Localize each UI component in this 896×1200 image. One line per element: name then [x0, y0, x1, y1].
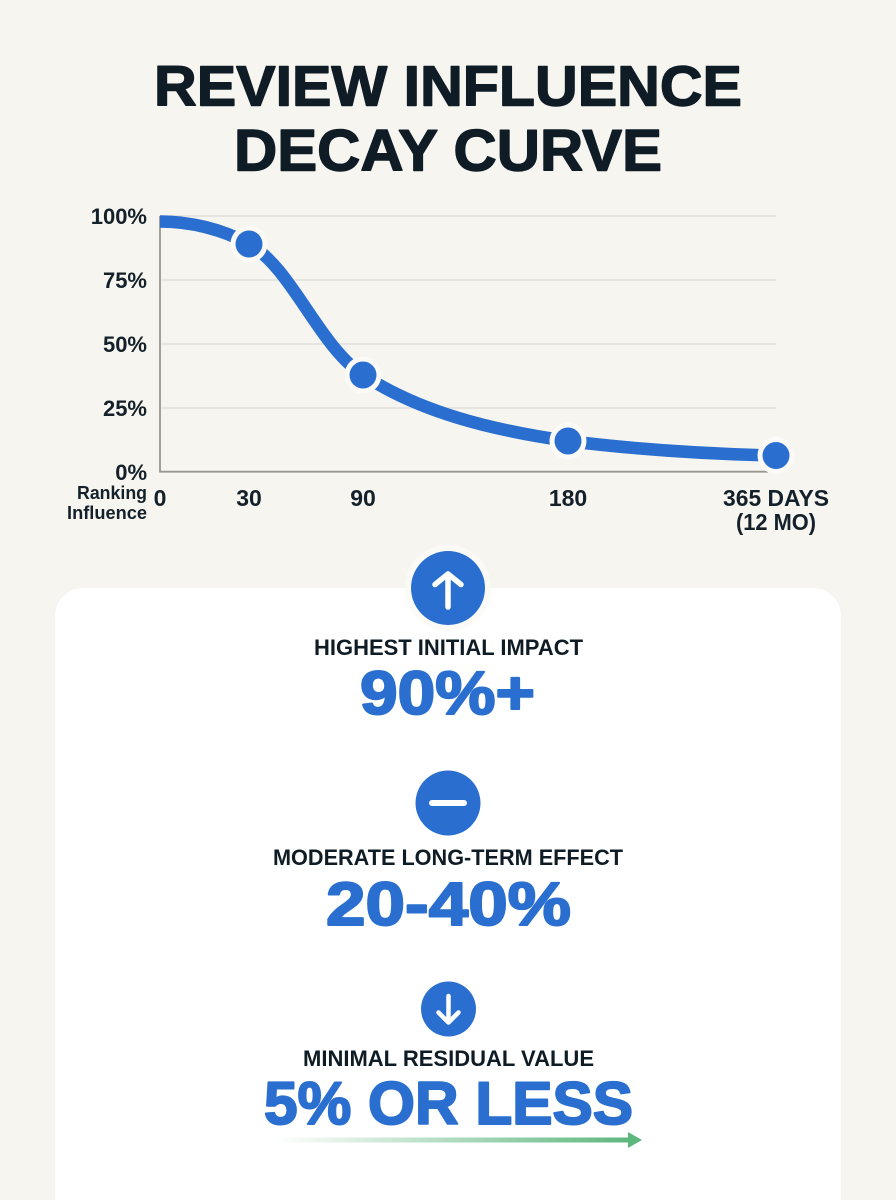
- icon: down arrow: [421, 982, 476, 1036]
- data point: day 30: [230, 226, 268, 262]
- data point: day 180: [550, 422, 586, 460]
- y axis title: [67, 483, 147, 523]
- x axis labels: 30: [236, 485, 262, 511]
- stat value: 20-40%: 20-40%: [326, 870, 571, 938]
- panel: key statistics: [55, 545, 841, 1200]
- y axis labels: 100%: [91, 204, 147, 229]
- x axis labels: 365 DAYS: [723, 485, 829, 511]
- x axis labels: [154, 485, 829, 535]
- stat value: 90%+: 90%+: [360, 659, 535, 727]
- y axis labels: 0%: [115, 460, 147, 485]
- y axis labels: [91, 204, 147, 485]
- y axis labels: 75%: [103, 268, 147, 293]
- decay curve: [160, 222, 775, 456]
- x axis labels: 180: [549, 485, 587, 511]
- data point: day 365: [758, 437, 794, 474]
- x axis labels: 90: [350, 485, 376, 511]
- x axis labels: 0: [154, 485, 166, 511]
- x axis labels: (12 MO): [736, 509, 816, 535]
- icon: up arrow: [405, 545, 491, 631]
- y axis labels: 25%: [103, 396, 147, 421]
- y axis title: Ranking: [77, 483, 147, 503]
- title: [154, 54, 742, 184]
- icon: minus: [416, 770, 480, 836]
- title: DECAY CURVE: [234, 118, 662, 184]
- arrow: green gradient: [275, 1132, 642, 1148]
- data point: day 90: [344, 356, 382, 394]
- y axis title: Influence: [67, 503, 147, 523]
- y axis labels: 50%: [103, 332, 147, 357]
- line chart: ranking influence decay: [67, 204, 829, 535]
- stat label: highest initial impact: HIGHEST INITIAL IMPACT: [314, 635, 583, 660]
- stat label: moderate long-term effect: MODERATE LONG-TERM EFFECT: [273, 845, 623, 870]
- stat value: 5% or less: 5% OR LESS: [264, 1070, 633, 1137]
- title: REVIEW INFLUENCE: [154, 54, 742, 118]
- stat label: minimal residual value: MINIMAL RESIDUAL VALUE: [303, 1046, 594, 1071]
